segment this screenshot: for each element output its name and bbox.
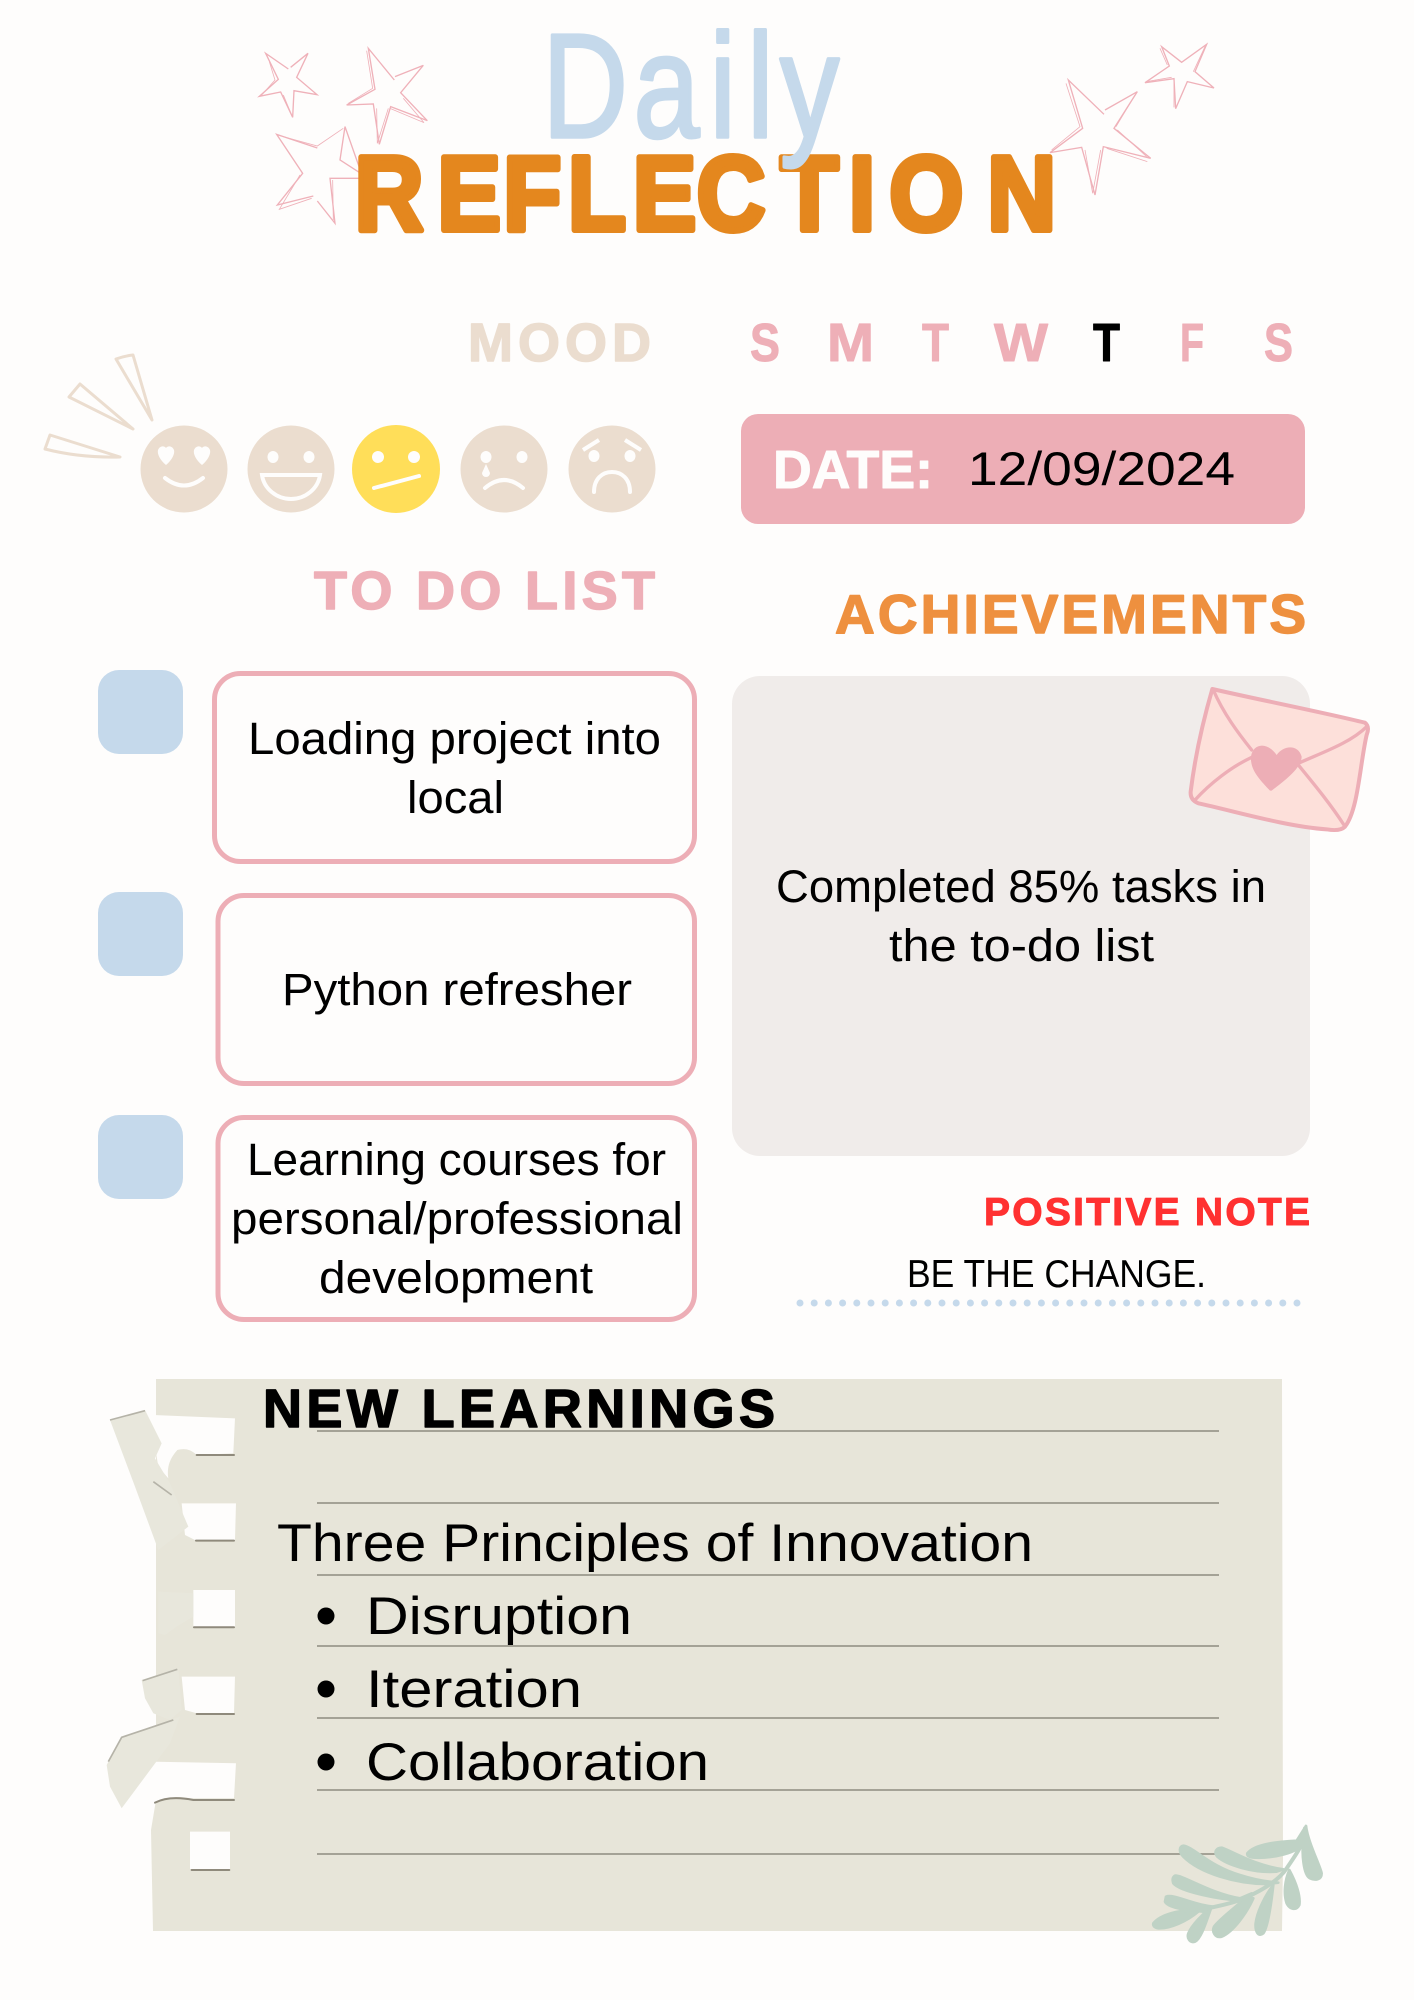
ruled lines [317,1431,1219,1854]
day: Saturday: S [1264,313,1293,373]
task 2: Python refresher [282,964,632,1015]
checkbox 2 [98,892,183,976]
title [355,4,1056,253]
task 3: personal/professional [231,1193,683,1244]
task 3 [218,1118,694,1320]
task 3: Learning courses for [247,1134,666,1185]
day: Monday: M [827,313,874,373]
date value: 12/09/2024 [968,442,1235,495]
panel: mood [45,313,656,513]
icon: upset face [568,426,656,512]
decorative stars left [259,48,427,223]
task 1 [214,674,694,862]
bullet: Iteration: Iteration [366,1660,582,1719]
icon: envelope with heart [1191,689,1368,830]
torn holes and flaps [107,1410,236,1870]
task 1: local [407,772,504,823]
icon: crying face [460,426,548,512]
day: Friday: F [1180,313,1204,373]
paper sheet [151,1379,1283,1931]
bullet: Collaboration: Collaboration [366,1733,709,1792]
panel: achievements [732,583,1368,1156]
checkbox 1 [98,670,183,754]
task 1: Loading project into [248,713,661,764]
day: Sunday: S [750,313,780,373]
bullet: Disruption: Disruption [366,1587,632,1646]
panel: to do list [98,561,694,1320]
task 2 [218,896,694,1084]
heading: mood: MOOD [468,313,651,373]
day: Thursday selected: T [1093,313,1120,373]
decorative stars right [1050,44,1214,195]
day: Tuesday: T [922,313,949,373]
learning topic: Three Principles of Innovation [277,1514,1033,1573]
achievements card [732,676,1310,1156]
note text: BE THE CHANGE. [907,1253,1206,1296]
achievements text: the to-do list [889,920,1155,971]
achievements text: Completed 85% tasks in [776,861,1266,912]
heading: achievements: ACHIEVEMENTS [835,583,1306,645]
achievements text [776,861,1266,971]
icon: leaf sprig [1153,1826,1322,1942]
heading: positive note: POSITIVE NOTE [984,1191,1310,1234]
date label: DATE: [773,440,933,500]
date bar [741,414,1305,524]
icon: heart-eyes face [140,426,228,512]
icon: laughing face [248,426,334,512]
panel: new learnings notepaper [107,1379,1322,1942]
panel: positive note [800,1191,1310,1303]
icon: neutral face selected [352,425,440,513]
dotted underline [800,1300,1304,1306]
weekday row [750,313,1293,373]
task 3: development [319,1252,594,1303]
icon: excitement rays [45,355,152,457]
heading: to do list: TO DO LIST [314,561,655,621]
title word: Daily: Daily [542,4,839,169]
checkbox 3 [98,1115,183,1199]
title word: REFLECTION: REFLECTION [355,135,1056,253]
day: Wednesday: W [994,313,1048,373]
heading: new learnings: NEW LEARNINGS [263,1379,775,1439]
